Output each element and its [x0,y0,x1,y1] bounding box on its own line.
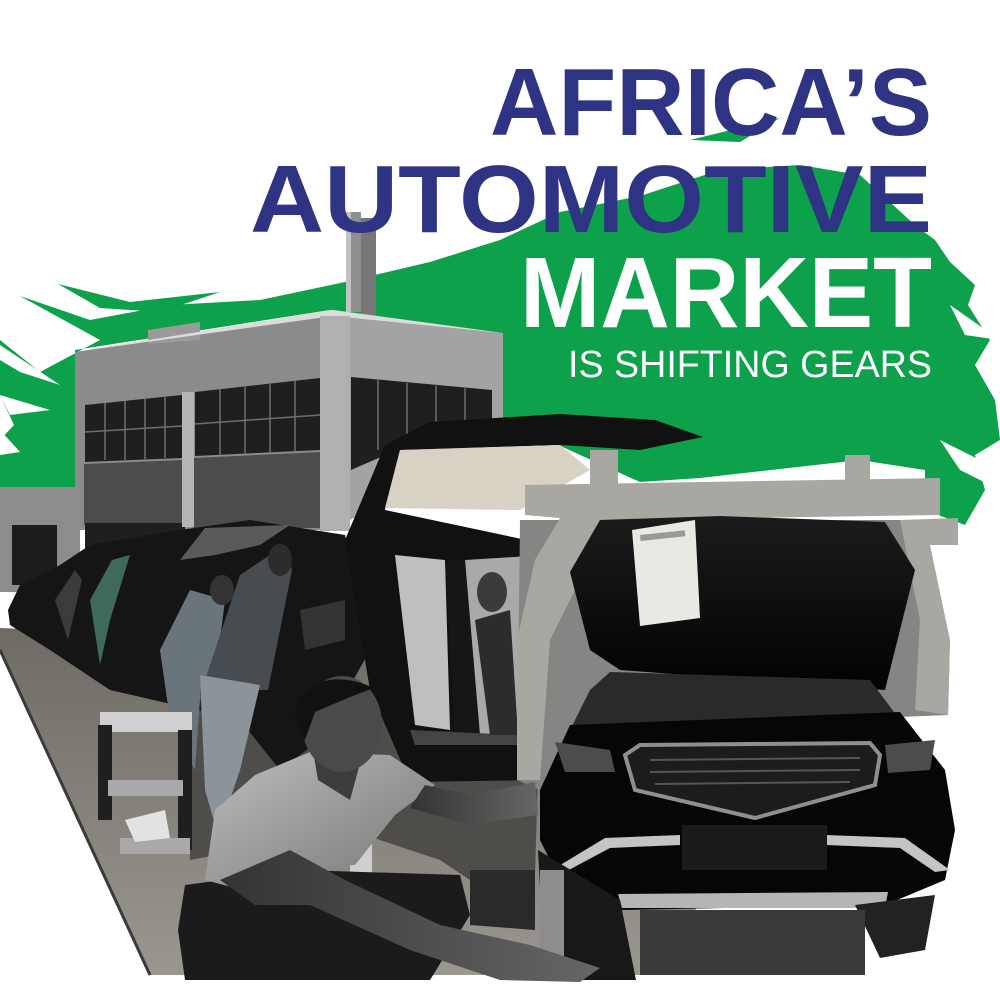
grey overhead carrier frame [517,450,958,780]
factory building [0,310,503,592]
green brush stroke [0,118,1000,525]
neck [312,745,365,800]
paper note on hood [632,520,700,626]
equipment cart [98,712,192,854]
white brush streaks [0,305,1000,490]
worker in background [475,572,518,735]
headlights [555,742,615,772]
title: AUTOMOTIVE [250,146,932,253]
open hood [570,516,915,690]
title: MARKET [520,237,932,349]
factory floor [0,628,700,975]
chimney [346,212,376,316]
open-door car body [345,414,703,782]
assembly line cars in the distance [8,520,370,770]
car body [540,712,955,910]
engine bay [570,672,900,730]
hair [295,679,374,740]
subtitle: IS SHIFTING GEARS [568,344,932,386]
title: AFRICA’S [490,49,932,156]
forward arm [410,782,538,825]
head [302,676,382,772]
trousers [178,870,470,980]
under-car machinery [640,910,865,975]
wheels [538,850,636,980]
workers at car [160,544,292,835]
main black car [538,516,955,980]
shaded backdrop behind main car [517,520,950,790]
lane edge line [0,650,150,975]
title [250,49,932,349]
chrome trim [552,835,680,872]
building windows [85,377,492,470]
foreground worker [178,676,600,982]
t-shirt [205,752,435,888]
white column and base [350,830,535,930]
lower arm [220,850,600,982]
grille [625,743,880,818]
shadow band behind workers [190,690,540,880]
